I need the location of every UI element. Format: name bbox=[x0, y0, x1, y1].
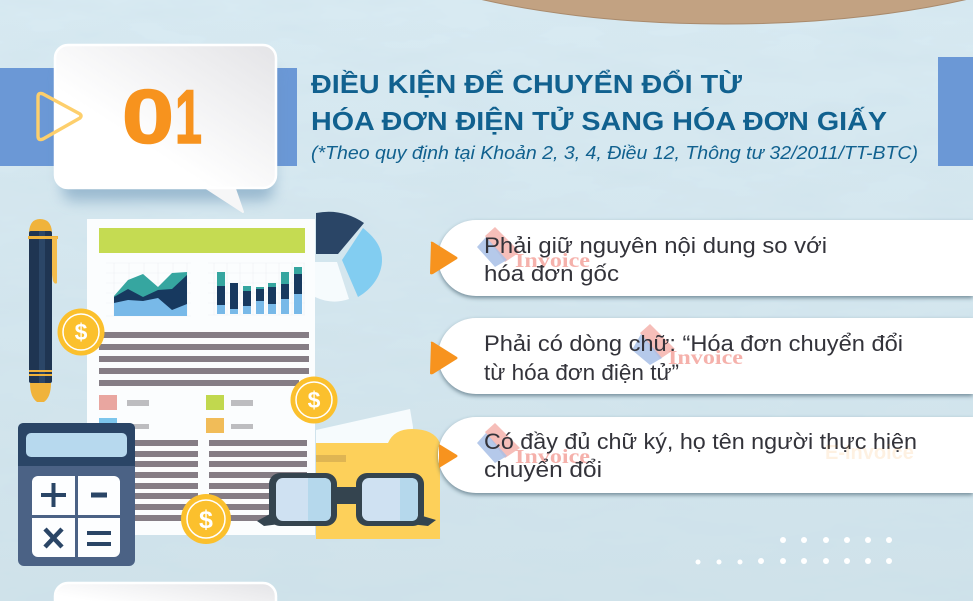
play icon bbox=[38, 93, 81, 140]
decorative dots bbox=[696, 537, 892, 564]
area chart bbox=[106, 263, 191, 316]
card tail bbox=[203, 186, 243, 212]
stacked bar chart bbox=[208, 263, 305, 315]
document legend bbox=[99, 395, 253, 433]
coin left bbox=[58, 308, 104, 356]
arrow 1 bbox=[430, 242, 458, 274]
coin right: $ bbox=[308, 387, 321, 413]
header band right bbox=[938, 57, 973, 166]
glasses bbox=[257, 473, 436, 526]
calculator symbols bbox=[41, 483, 66, 507]
header band left bbox=[0, 68, 297, 166]
watermark 3: Invoice bbox=[515, 446, 590, 468]
text 2: từ hóa đơn điện tử” bbox=[484, 360, 679, 385]
document table lines bbox=[130, 440, 307, 521]
number 01: 0 bbox=[122, 75, 174, 160]
top brown semicircle bbox=[324, 0, 973, 24]
number 01: 1 bbox=[175, 75, 202, 160]
next section card bbox=[55, 583, 276, 601]
heading line 1: ĐIỀU KIỆN ĐỂ CHUYỂN ĐỔI TỪ bbox=[311, 69, 742, 99]
card body bbox=[55, 45, 276, 188]
calculator bbox=[18, 423, 135, 566]
document page bbox=[87, 219, 315, 535]
condition 3 bbox=[438, 417, 973, 495]
pie chart bbox=[315, 212, 382, 302]
text 3: Có đầy đủ chữ ký, họ tên người thực hiện bbox=[484, 429, 917, 454]
pill 3 bbox=[438, 419, 973, 495]
illustration bbox=[18, 212, 440, 566]
coin left: $ bbox=[75, 319, 88, 345]
number 01 bbox=[122, 75, 202, 160]
arrow 2 bbox=[430, 342, 458, 374]
watermark 1 bbox=[477, 227, 590, 272]
pen bbox=[28, 219, 58, 402]
document text lines bbox=[99, 332, 309, 386]
number card bbox=[38, 45, 276, 212]
text 1: Phải giữ nguyên nội dung so với bbox=[484, 233, 827, 258]
arrow 3 bbox=[439, 444, 458, 468]
watermark 1: Invoice bbox=[515, 250, 590, 272]
condition 2 bbox=[430, 318, 973, 396]
pill 1 bbox=[438, 222, 973, 298]
pill 2 bbox=[438, 320, 973, 396]
coin bottom: $ bbox=[199, 506, 213, 534]
document green header bbox=[99, 228, 305, 253]
text 3: chuyển đổi bbox=[484, 457, 602, 482]
heading citation: (*Theo quy định tại Khoản 2, 3, 4, Điều 12, Thông tư 32/2011/TT-BTC) bbox=[311, 143, 918, 163]
faint watermark on pill 3: E-Invoice bbox=[825, 442, 914, 464]
text 1: hóa đơn gốc bbox=[484, 261, 619, 286]
folder bbox=[316, 409, 440, 539]
watermark 2 bbox=[632, 324, 743, 369]
watermark 3 bbox=[477, 423, 590, 468]
coin right bbox=[290, 376, 338, 424]
text 2: Phải có dòng chữ: “Hóa đơn chuyển đổi bbox=[484, 331, 903, 356]
watermark 2: Invoice bbox=[668, 347, 743, 369]
coin bottom bbox=[181, 494, 231, 544]
condition 1 bbox=[430, 220, 973, 298]
heading bbox=[311, 69, 918, 163]
heading line 2: HÓA ĐƠN ĐIỆN TỬ SANG HÓA ĐƠN GIẤY bbox=[311, 105, 887, 136]
